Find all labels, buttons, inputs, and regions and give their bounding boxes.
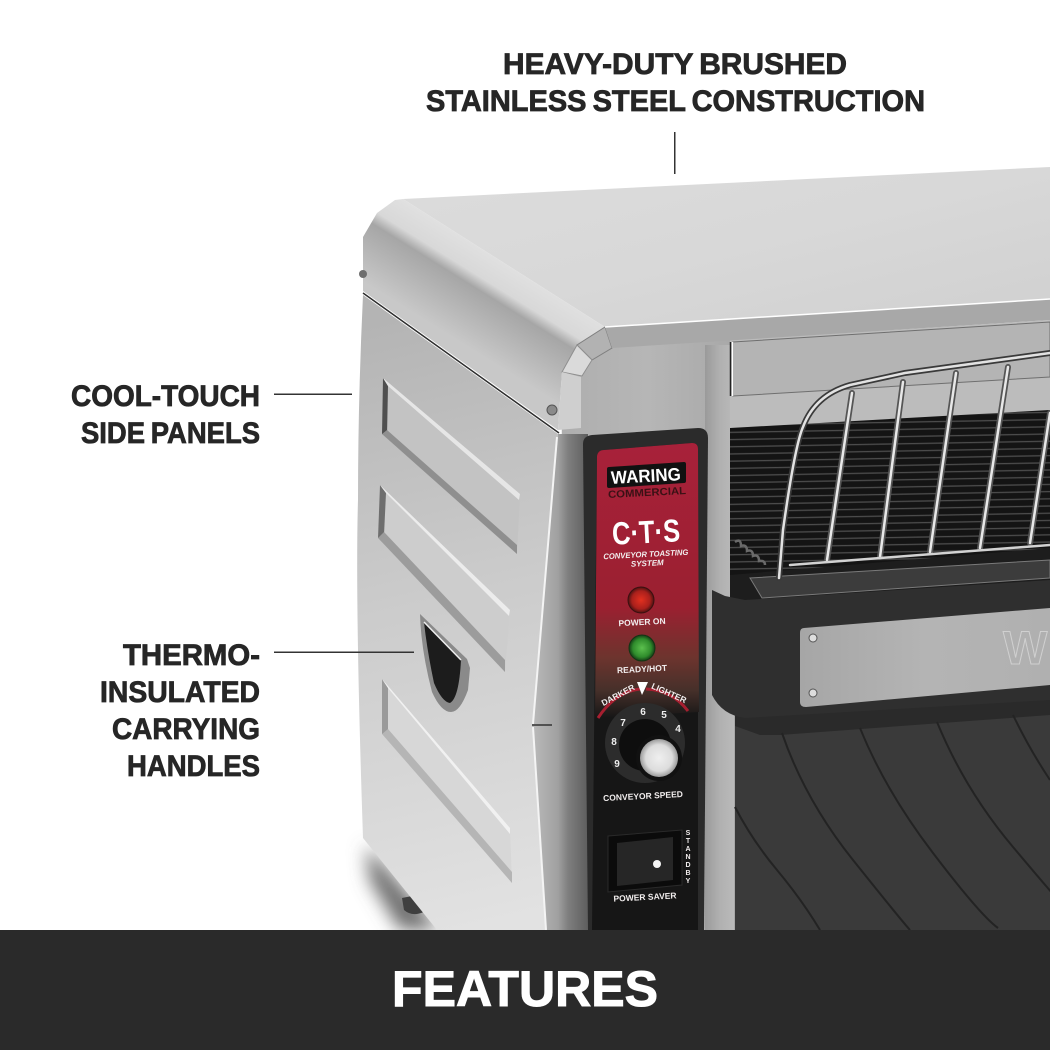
standby label: T <box>686 838 691 845</box>
darkness scale <box>598 681 688 718</box>
floor shadow <box>366 845 440 930</box>
edge seam <box>532 724 552 726</box>
ready led <box>629 635 655 661</box>
plate edge <box>730 342 732 396</box>
side panel <box>357 295 558 930</box>
screw left <box>359 270 367 278</box>
panel housing <box>583 428 708 930</box>
product name <box>603 548 689 570</box>
front face <box>730 320 1050 430</box>
crumb tray <box>750 560 1050 598</box>
power label: POWER ON <box>618 616 666 628</box>
standby label <box>685 830 691 885</box>
standby label: S <box>686 830 691 837</box>
right column strip <box>705 345 734 930</box>
recessed panel lower <box>382 679 512 883</box>
plate screw bottom <box>809 689 817 697</box>
power saver label: POWER SAVER <box>613 890 677 904</box>
wire guard <box>779 353 1050 578</box>
side front edge <box>532 434 590 930</box>
footer title: FEATURES <box>392 961 658 1017</box>
darkness scale: DARKER <box>600 682 636 708</box>
plate logo: W <box>1003 621 1048 674</box>
callout: cool-touch side panels: COOL-TOUCH <box>71 380 260 413</box>
corner cap <box>577 327 612 360</box>
corner cap lower <box>562 345 592 376</box>
product name: CONVEYOR TOASTING <box>603 548 688 561</box>
product name: SYSTEM <box>631 558 664 569</box>
plate screw top <box>809 634 817 642</box>
lower chamber <box>735 700 1050 930</box>
power led <box>628 587 654 613</box>
callout: carrying handles: HANDLES <box>127 750 260 783</box>
metal name plate <box>800 608 1050 707</box>
standby label: A <box>685 846 691 853</box>
brand badge <box>607 462 687 501</box>
toaster illustration <box>357 167 1050 930</box>
brand badge: WARING <box>610 464 681 488</box>
top edge highlight <box>605 299 1050 327</box>
recessed panel middle <box>378 485 510 672</box>
speed dial: 4 <box>675 724 681 735</box>
speed dial: 8 <box>611 737 617 748</box>
callout: stainless steel construction: HEAVY-DUTY BRUSHED <box>503 48 847 81</box>
edge highlight <box>533 437 557 930</box>
callout: carrying handles <box>100 639 414 783</box>
carrying handle <box>420 614 470 712</box>
red fascia <box>595 443 699 718</box>
corner strip <box>558 372 581 430</box>
speed dial: 7 <box>620 718 626 729</box>
darkness scale: LIGHTER <box>650 681 688 705</box>
front column <box>560 320 735 930</box>
front top band <box>605 299 1050 348</box>
standby label: D <box>685 862 691 869</box>
callout: cool-touch side panels <box>71 380 352 450</box>
callout: stainless steel construction: STAINLESS STEEL CONSTRUCTION <box>426 85 925 118</box>
upper plate <box>733 322 1050 396</box>
conveyor base <box>730 548 1050 610</box>
left bevel <box>363 199 605 430</box>
footer banner <box>0 930 1050 1050</box>
plate edge highlight <box>732 342 734 396</box>
model logo: C·T·S <box>611 512 681 552</box>
control panel <box>583 428 708 930</box>
panel face <box>592 443 698 930</box>
conveyor coil <box>735 541 765 565</box>
speed label: CONVEYOR SPEED <box>603 789 683 803</box>
rocker switch <box>608 830 682 892</box>
bevel seam <box>363 293 559 433</box>
conveyor opening <box>730 410 1050 600</box>
screw right <box>547 405 557 415</box>
standby label: B <box>685 870 691 877</box>
top plate <box>403 167 1050 327</box>
callout: cool-touch side panels: SIDE PANELS <box>81 417 260 450</box>
black shelf <box>712 580 1050 718</box>
brand badge: COMMERCIAL <box>608 485 687 501</box>
ready label: READY/HOT <box>617 663 668 675</box>
toaster foot <box>402 896 424 914</box>
speed dial: 9 <box>614 759 620 770</box>
callout: stainless steel construction <box>426 48 925 174</box>
speed dial: 5 <box>661 710 667 721</box>
standby label: Y <box>686 878 691 885</box>
callout: carrying handles: INSULATED <box>100 676 260 709</box>
recessed panel upper <box>382 378 520 554</box>
standby label: N <box>685 854 691 861</box>
speed dial <box>605 703 685 783</box>
speed dial: 6 <box>640 707 646 718</box>
callout: carrying handles: CARRYING <box>112 713 260 746</box>
callout: carrying handles: THERMO- <box>123 639 260 672</box>
